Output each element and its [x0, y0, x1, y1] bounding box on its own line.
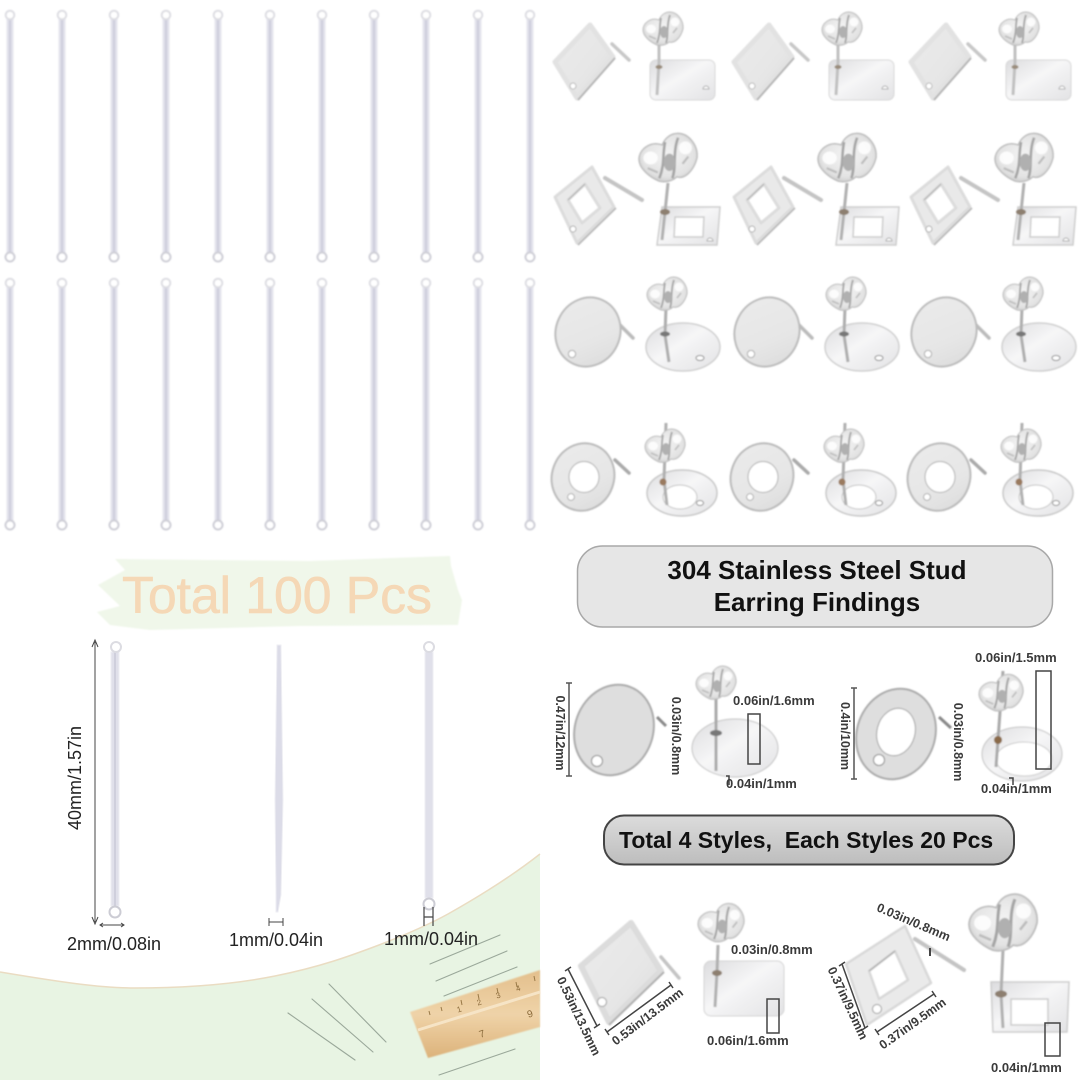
ruler lower digit: 7 — [478, 1028, 487, 1041]
label: thickness: 0.04in/1mm — [991, 1060, 1062, 1075]
loose pins on green — [288, 935, 517, 1075]
heading pill: 304 Stainless Steel Stud Earring Findings: 304 Stainless Steel Stud — [667, 555, 967, 585]
label: diameter: 0.4in/10mm — [838, 702, 852, 770]
label: pin: 0.03in/0.8mm — [669, 697, 683, 775]
green curved background with product photo — [0, 854, 540, 1080]
row: hollow rhombus studs — [555, 133, 1076, 245]
label: length: 40mm/1.57in — [65, 726, 85, 830]
label: thickness — [1009, 778, 1013, 785]
label: thickness: 1mm/0.04in — [229, 930, 323, 950]
label: hole: 0.06in/1.6mm — [707, 1033, 789, 1048]
heading pill: 304 Stainless Steel Stud Earring Findings — [578, 546, 1052, 627]
dimension line — [851, 688, 857, 779]
label: pin: 0.03in/0.8mm — [875, 901, 952, 944]
diagram: ring stud dimensions — [838, 650, 1062, 796]
ruler digit 2: 2 — [476, 997, 483, 1008]
hole marker — [748, 714, 760, 764]
heading pill: 304 Stainless Steel Stud Earring Findings: Earring Findings — [714, 587, 920, 617]
label: ring: 1mm/0.04in — [384, 929, 478, 949]
ruler digit 4: 4 — [515, 983, 522, 994]
ruler lower digit right: 9 — [526, 1008, 535, 1021]
dimension arrow: width — [100, 923, 124, 927]
diagram: round stud dimensions: 0.04in/1mm — [726, 776, 797, 791]
dimension line: left edge — [839, 962, 868, 1030]
ruler digit 3: 3 — [495, 990, 502, 1001]
hole marker — [1045, 1023, 1060, 1056]
label: width: 2mm/0.08in — [67, 934, 161, 954]
label: left edge: 0.53in/13.5mm — [554, 975, 603, 1058]
diagram: hollow rhombus stud dimensions — [825, 894, 1069, 1075]
label: left edge: 0.37in/9.5mm — [825, 965, 871, 1042]
diagram: bar link front with length and width — [65, 640, 161, 954]
panel: earring grid — [542, 12, 1076, 520]
diagram: bar link side view — [229, 645, 323, 950]
wooden ruler — [410, 970, 540, 1058]
dimension line: right edge — [875, 991, 936, 1035]
row: flat round studs — [544, 277, 1076, 377]
dimension line — [566, 683, 572, 776]
label: right edge: 0.53in/13.5mm — [609, 985, 686, 1048]
label: thickness — [726, 776, 729, 785]
label: pin: 0.03in/0.8mm — [951, 703, 965, 781]
label: right edge: 0.37in/9.5mm — [877, 995, 949, 1052]
dimension arrow: length — [92, 640, 98, 924]
hole marker — [1036, 671, 1051, 769]
row: rhombus studs — [555, 12, 1071, 100]
panel: bar links top row — [6, 11, 534, 262]
title: Total 100 Pcs: Total 100 Pcs — [122, 567, 432, 625]
diagram: round stud dimensions — [553, 666, 815, 791]
pin tick — [929, 948, 931, 956]
diagram: bar link wire thickness — [384, 642, 478, 949]
label: diameter: 0.47in/12mm — [553, 695, 567, 771]
heading pill: total styles: Total 4 Styles, Each Styles 20 Pcs — [619, 827, 993, 853]
label: hole: 0.06in/1.5mm — [975, 650, 1057, 665]
label: hole: 0.06in/1.6mm — [733, 693, 815, 708]
title brush swatch — [97, 556, 462, 630]
row: ring studs — [542, 423, 1073, 520]
dimension line: right edge — [605, 982, 673, 1035]
ruler digits: 1 — [456, 1004, 463, 1015]
panel: bar links bottom row — [6, 279, 534, 530]
hole marker — [767, 999, 779, 1033]
diagram: ring stud dimensions: 0.04in/1mm — [981, 781, 1052, 796]
dimension line: left edge — [565, 967, 600, 1028]
dimension tick: ring — [424, 907, 433, 926]
diagram: rhombus stud dimensions — [554, 903, 813, 1058]
dimension tick: thickness — [269, 918, 283, 926]
label: pin: 0.03in/0.8mm — [731, 942, 813, 957]
heading pill: total styles — [604, 816, 1014, 864]
